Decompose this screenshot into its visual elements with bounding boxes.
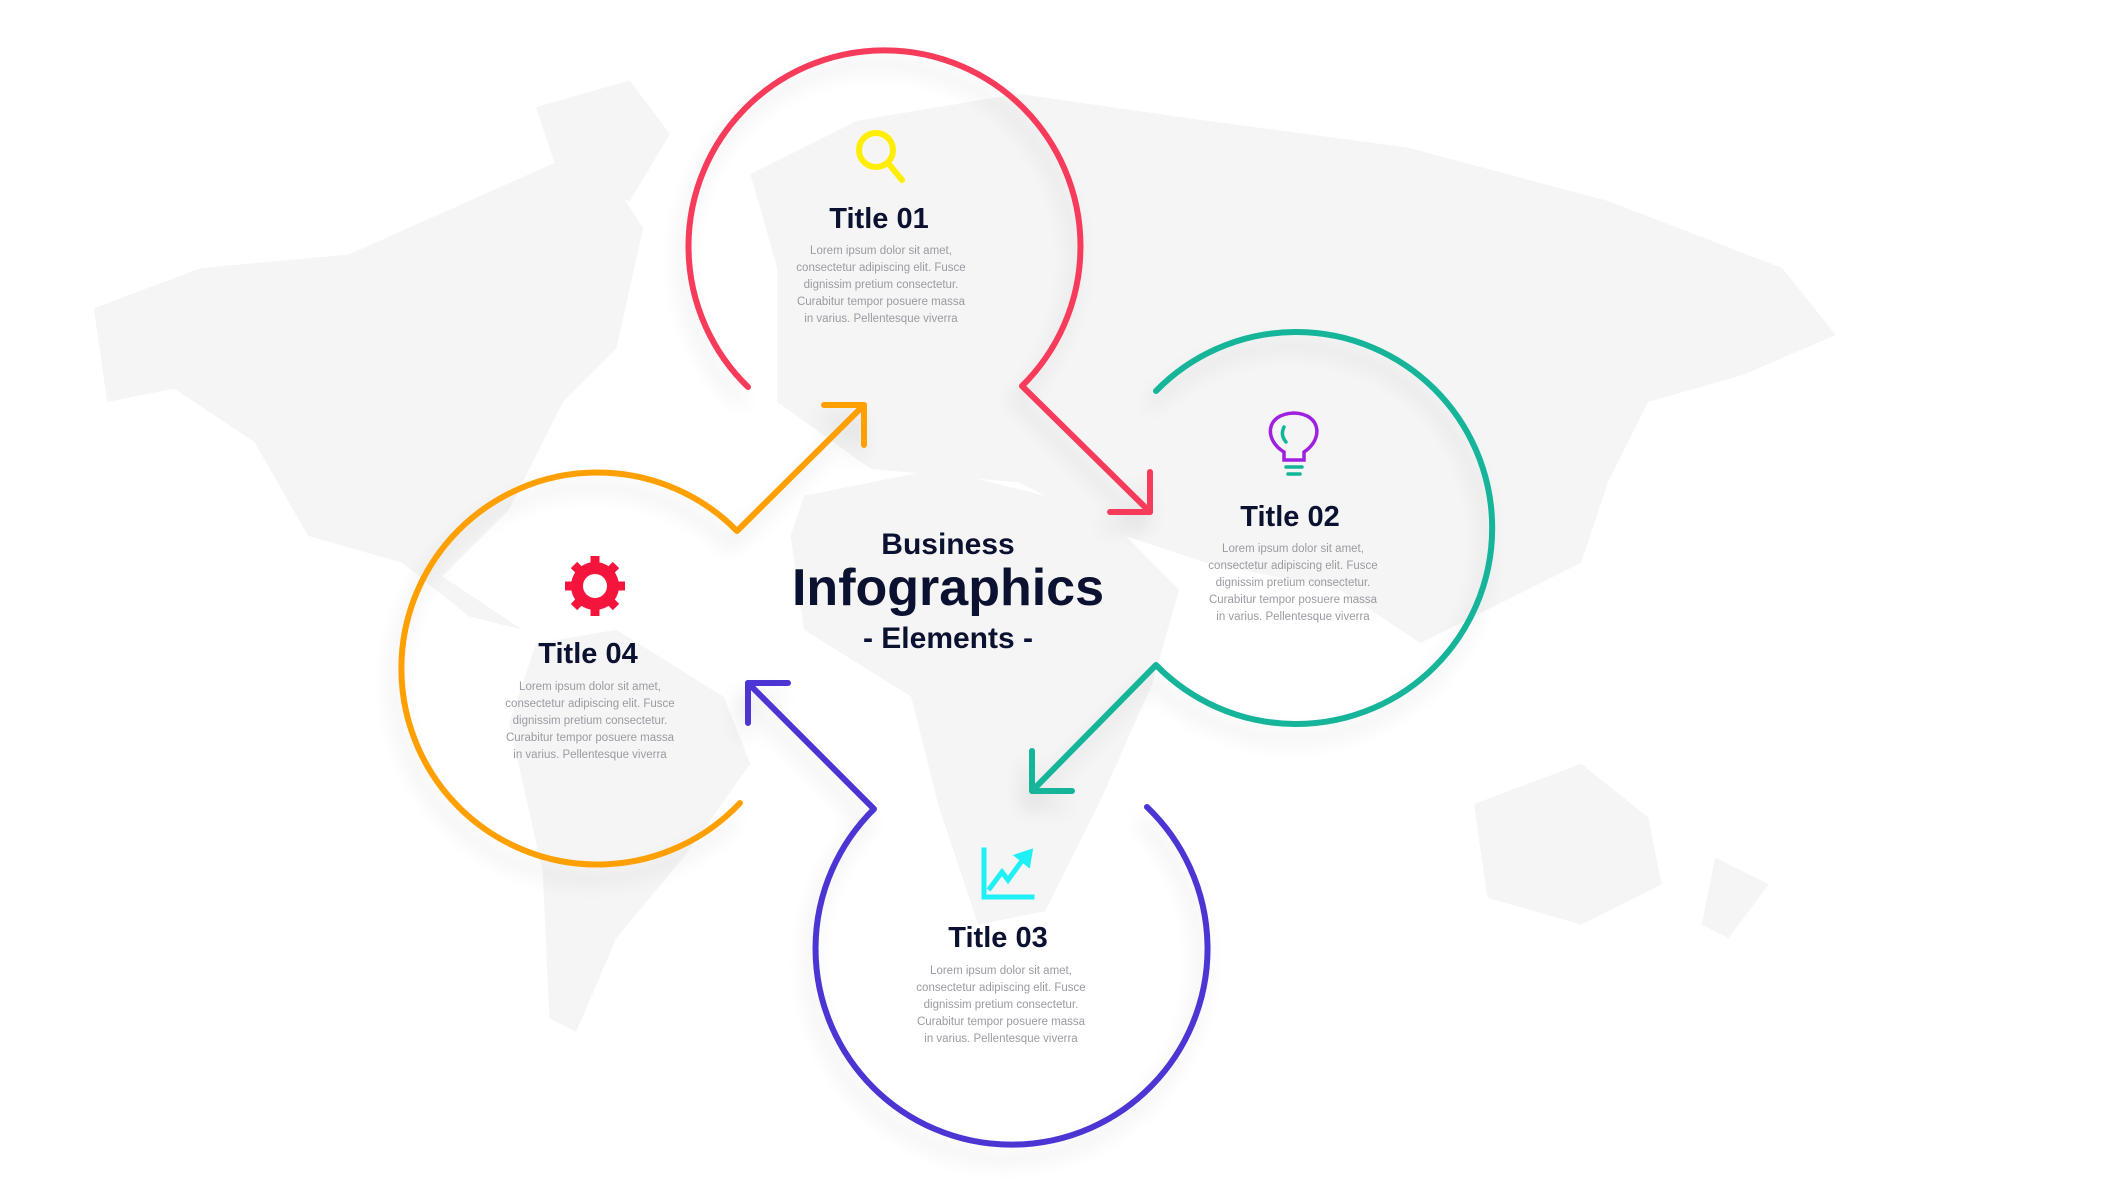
- panel: step 2 (teal loop): [1032, 332, 1492, 791]
- text block: step 3: consectetur adipiscing elit. Fusce: [916, 982, 1086, 994]
- title: Business Infographics Elements: Business: [881, 528, 1015, 561]
- panel: step 3 (purple loop): [748, 683, 1208, 1145]
- text block: step 4: [505, 681, 675, 761]
- panel: step 1 (red loop): [688, 50, 1150, 512]
- text block: step 2: consectetur adipiscing elit. Fusce: [1208, 560, 1378, 572]
- text block: step 1: in varius. Pellentesque viverra: [804, 313, 958, 325]
- text block: step 1: Lorem ipsum dolor sit amet,: [810, 245, 952, 257]
- text block: step 1: consectetur adipiscing elit. Fusce: [796, 262, 966, 274]
- title: Business Infographics Elements: Infographics: [792, 559, 1104, 617]
- world map background: [94, 80, 1836, 1032]
- title: Business Infographics Elements: [792, 528, 1104, 655]
- text block: step 4: in varius. Pellentesque viverra: [513, 749, 667, 761]
- text block: step 1: [796, 245, 966, 325]
- text block: step 4: Curabitur tempor posuere massa: [506, 732, 675, 744]
- text block: step 3: Lorem ipsum dolor sit amet,: [930, 965, 1072, 977]
- heading: Title 02: Title 02: [1240, 501, 1340, 533]
- heading: Title 04: Title 04: [538, 638, 638, 670]
- text block: step 3: in varius. Pellentesque viverra: [924, 1033, 1078, 1045]
- text block: step 1: dignissim pretium consectetur.: [804, 279, 958, 291]
- text block: step 2: dignissim pretium consectetur.: [1216, 577, 1370, 589]
- icon: gear: [565, 556, 625, 616]
- text block: step 1: Curabitur tempor posuere massa: [797, 296, 966, 308]
- text block: step 3: dignissim pretium consectetur.: [924, 999, 1078, 1011]
- text block: step 2: Curabitur tempor posuere massa: [1209, 594, 1378, 606]
- icon: light bulb: [1270, 413, 1317, 474]
- text block: step 2: [1208, 543, 1378, 623]
- text block: step 3: [916, 965, 1086, 1045]
- text block: step 4: consectetur adipiscing elit. Fusce: [505, 698, 675, 710]
- text block: step 2: in varius. Pellentesque viverra: [1216, 611, 1370, 623]
- text block: step 4: dignissim pretium consectetur.: [513, 715, 667, 727]
- icon: magnifier: [859, 133, 902, 180]
- text block: step 2: Lorem ipsum dolor sit amet,: [1222, 543, 1364, 555]
- title: Business Infographics Elements: - Elements -: [863, 622, 1033, 655]
- heading: Title 03: Title 03: [948, 922, 1048, 954]
- text block: step 4: Lorem ipsum dolor sit amet,: [519, 681, 661, 693]
- heading: Title 01: Title 01: [829, 203, 929, 235]
- panel: step 4 (orange loop): [401, 405, 864, 865]
- icon: growth chart: [984, 850, 1032, 897]
- text block: step 3: Curabitur tempor posuere massa: [917, 1016, 1086, 1028]
